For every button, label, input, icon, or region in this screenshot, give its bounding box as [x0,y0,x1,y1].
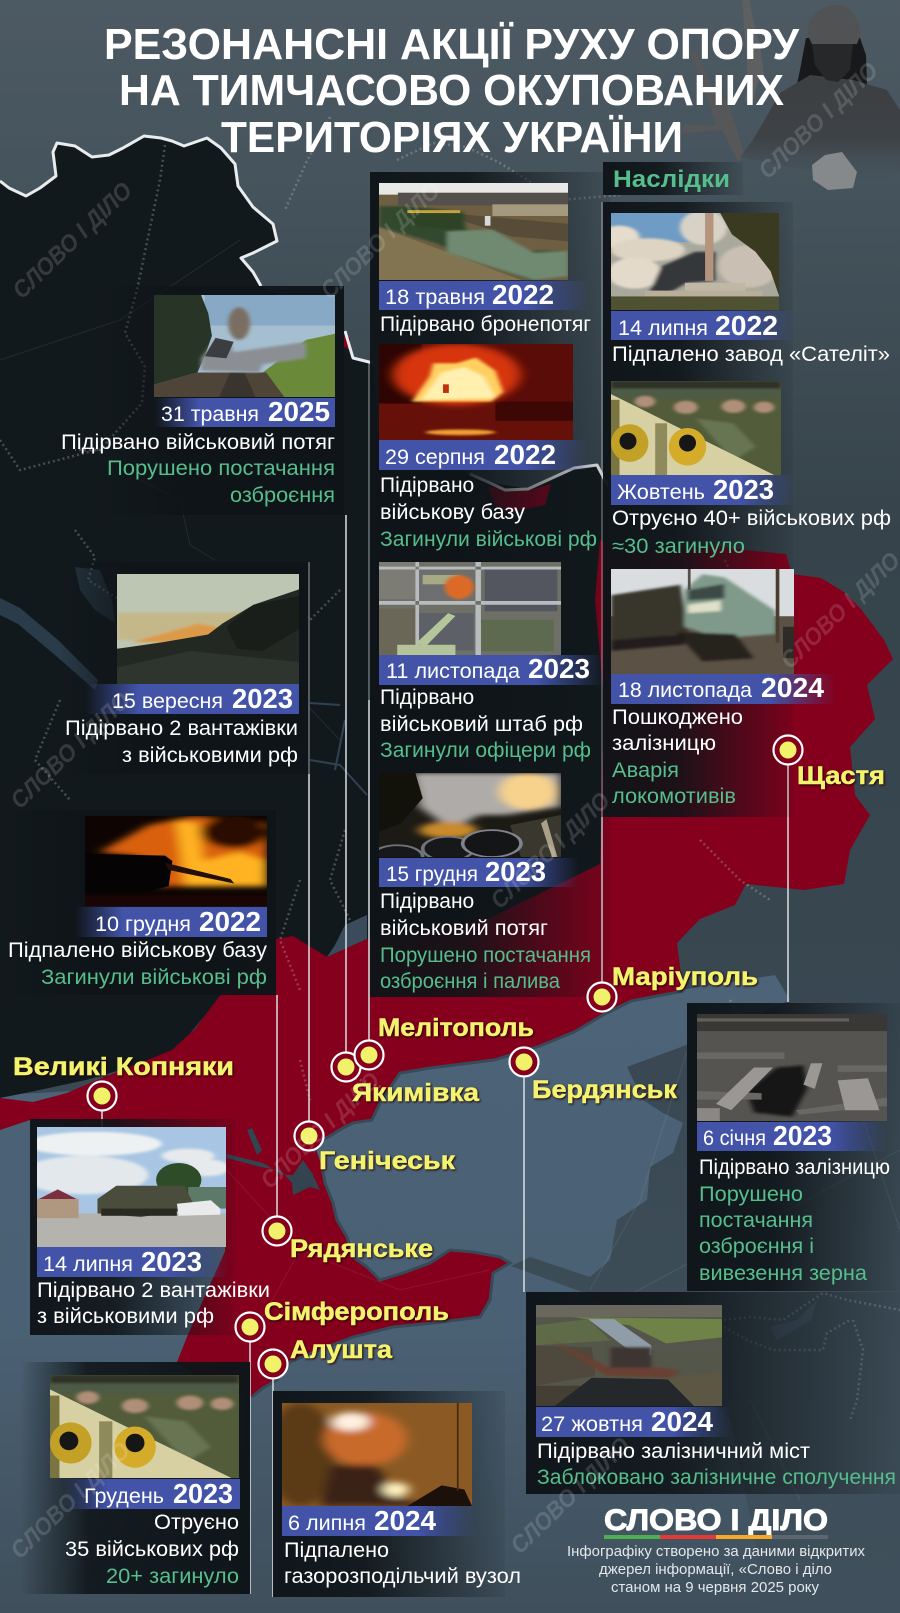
caption: Підірвано [380,686,474,709]
panel: 6 липня 2024 [267,1391,521,1597]
event: 14 липня 2022 [599,210,890,366]
place labels: Сімферополь [264,1298,449,1326]
panel: central column [370,172,610,997]
event: 18 травня 2022 [379,183,591,336]
caption: вивезення зерна [699,1262,867,1285]
event: 18 листопада 2024 [611,569,836,808]
person with rifles [680,0,900,190]
cap [808,5,860,44]
date bar [536,1406,731,1437]
photo: fire at base [85,816,267,906]
date bar [611,310,796,341]
date bar [379,439,589,470]
date bar: 2022 [715,310,778,341]
date bar: 2023 [173,1478,233,1509]
caption [284,1539,521,1588]
caption: озброєння [230,484,335,507]
watermarks: СЛОВО І ДІЛО [485,787,616,914]
date bar: Жовтень [617,481,705,504]
date bar: 2022 [494,439,556,470]
date bar: 2022 [492,279,554,310]
caption: ≈30 загинуло [612,535,745,558]
photo: trucks at sunset [117,574,299,684]
caption [37,1279,270,1328]
caption: з військовими рф [37,1305,214,1328]
event: Жовтень 2023 [611,381,891,558]
date bar: 11 листопада [386,660,520,683]
caption: Порушено постачання [107,457,335,480]
date bar: 29 серпня [385,446,485,469]
caption: локомотивів [612,785,736,808]
photo: derailed locomotives [611,569,794,674]
panel: 27 жовтня 2024 [526,1292,900,1494]
caption: Підірвано [380,890,474,913]
date bar: 6 січня [703,1127,766,1150]
caption: військовий штаб рф [380,713,583,736]
caption [612,507,891,558]
photo: aerial map [379,562,561,655]
date bar: 27 жовтня [541,1413,643,1436]
caption [65,717,298,767]
date bar: 18 листопада [618,679,752,702]
place labels: Алушта [290,1336,393,1364]
panel: 10 грудня 2022 [0,810,276,995]
place labels: Маріуполь [612,963,758,991]
caption: Підірвано [380,474,474,497]
date bar: 15 вересня [112,690,223,713]
place labels: Мелітополь [378,1014,534,1042]
date bar: 2024 [651,1406,713,1437]
caption: Підпалено [284,1539,389,1562]
occupied territory [0,540,893,1397]
photo: burning base [379,344,573,440]
date bar [75,906,267,937]
place labels: Генічеськ [319,1147,456,1175]
caption: 35 військових рф [65,1538,239,1561]
date bar: 6 липня [288,1512,366,1535]
watermarks: СЛОВО І ДІЛО [505,1432,636,1559]
watermarks: СЛОВО І ДІЛО [315,177,446,304]
caption: Порушено постачання [380,944,591,967]
caption: військову базу [380,501,526,524]
caption [380,474,597,551]
event: 29 серпня 2022 [379,344,597,551]
caption: Підірвано залізницю [699,1156,890,1179]
sea [0,975,790,1613]
photo: destroyed bridge [536,1305,722,1406]
panel: Грудень 2023 [20,1362,250,1594]
heading: consequences [603,162,743,195]
date bar [697,1120,887,1151]
caption: Підпалено військову базу [8,939,268,962]
date bar [85,683,299,714]
date bar: 14 липня [43,1253,133,1276]
photo: soldiers and poison barrels [50,1375,239,1478]
date bar: 31 травня [161,403,259,426]
title [104,20,800,162]
date bar [154,396,335,427]
rifle 1 [742,0,764,105]
caption: Отруєно [154,1511,239,1534]
date bar: 2023 [773,1120,832,1151]
caption: Підірвано 2 вантажівки [65,717,298,740]
title: НА ТИМЧАСОВО ОКУПОВАНИХ [119,66,784,115]
hood [797,38,867,84]
photo: Satellite plant [611,213,779,310]
photo: gas explosion [282,1403,472,1506]
caption: Підірвано бронепотяг [380,313,591,336]
title: ТЕРИТОРІЯХ УКРАЇНИ [221,113,683,162]
date bar: 2023 [232,683,293,714]
caption [380,686,591,762]
map markers [88,736,802,1378]
date bar [611,474,796,505]
caption [380,890,591,993]
place labels: Якимівка [352,1079,480,1107]
panel: 15 вересня 2023 [60,562,308,774]
date bar: 2024 [374,1505,436,1536]
photo: derailed train [154,295,335,397]
photo: soldiers and poison barrels [611,381,781,475]
panel: right column [599,202,891,817]
rifle 2 [680,50,745,162]
watermarks: СЛОВО І ДІЛО [5,1437,136,1564]
date bar: 10 грудня [95,913,191,936]
caption [612,706,743,808]
panel: 6 січня 2023 [687,1003,900,1291]
caption: Отруєно 40+ військових рф [612,507,891,530]
caption [65,1511,239,1588]
date bar: 2023 [141,1246,202,1277]
caption: Пошкоджено [612,706,743,729]
caption: Загинули військові рф [41,966,267,989]
date bar: 2023 [485,856,546,887]
coast halo [252,991,683,1397]
mask [812,44,853,82]
caption [537,1440,896,1489]
source note: станом на 9 червня 2025 року [611,1579,819,1596]
photo: armoured train [379,183,568,280]
panel: 31 травня 2025 [61,286,344,515]
free territory dark [0,136,608,1098]
caption: військовий потяг [380,917,548,940]
date bar: 14 липня [618,317,708,340]
date bar: 2025 [268,396,330,427]
caption: Заблоковано залізничне сполучення [537,1466,896,1489]
caption: газорозподільчий вузол [284,1565,521,1588]
date bar: 18 травня [385,286,485,309]
caption: 20+ загинуло [106,1565,239,1588]
source note: джерел інформації, «Слово і діло [599,1561,832,1578]
date bar [611,672,836,704]
panel: 14 липня 2023 [20,1119,270,1335]
date bar: 15 грудня [386,863,478,886]
caption: Підпалено завод «Сателіт» [612,343,890,366]
watermarks: СЛОВО І ДІЛО [255,1067,386,1194]
date bar: Грудень [84,1485,164,1508]
place labels [13,762,885,1364]
source note: Інфографіку створено за даними відкритих [567,1543,865,1560]
caption [8,939,268,989]
place labels: Бердянськ [532,1076,678,1104]
reservoir east [770,1300,817,1340]
caption: Підірвано залізничний міст [537,1440,810,1463]
date bar: 2023 [528,653,590,684]
date bar [63,1478,240,1509]
place labels: Великі Копняки [13,1053,234,1081]
caption: озброєння і [699,1235,814,1258]
watermarks: СЛОВО І ДІЛО [753,57,884,184]
photo: damaged railway [697,1014,887,1121]
date bar [379,653,604,685]
logo: Слово і діло: СЛОВО І ДІЛО [604,1504,828,1537]
source note [567,1543,865,1596]
caption: озброєння і палива [380,970,560,993]
caption [699,1156,890,1285]
watermarks: СЛОВО І ДІЛО [7,177,138,304]
photo: burning train [379,773,561,857]
event: 15 грудня 2023 [372,773,591,993]
caption: залізницю [612,732,716,755]
caption: Аварія [612,759,679,782]
title: РЕЗОНАНСНІ АКЦІЇ РУХУ ОПОРУ [104,20,800,69]
caption: Загинули військові рф [380,528,597,551]
caption: Підірвано 2 вантажівки [37,1279,270,1302]
border line [0,136,608,490]
date bar [379,279,589,310]
connector lines [102,202,788,1597]
date bar: 2022 [199,906,261,937]
Sivash water [227,1128,320,1195]
caption: Порушено [699,1183,803,1206]
caption: Підірвано військовий потяг [61,431,335,454]
date bar [282,1505,477,1536]
caption: з військовими рф [122,744,298,767]
hands [812,152,857,190]
heading: consequences: Наслідки [613,166,730,193]
place labels: Щастя [797,762,885,790]
place labels: Рядянське [290,1235,433,1263]
caption [61,431,335,507]
watermarks: СЛОВО І ДІЛО [5,687,136,814]
date bar: 2024 [761,672,824,703]
caption: постачання [699,1209,813,1232]
date bar [37,1246,227,1277]
caption: Загинули офіцери рф [380,739,591,762]
photo: truck on road [37,1127,226,1247]
reservoirs and rivers [0,598,98,690]
event: 11 листопада 2023 [379,562,604,762]
date bar [379,856,579,887]
jacket [740,75,900,187]
date bar: 2023 [713,474,774,505]
